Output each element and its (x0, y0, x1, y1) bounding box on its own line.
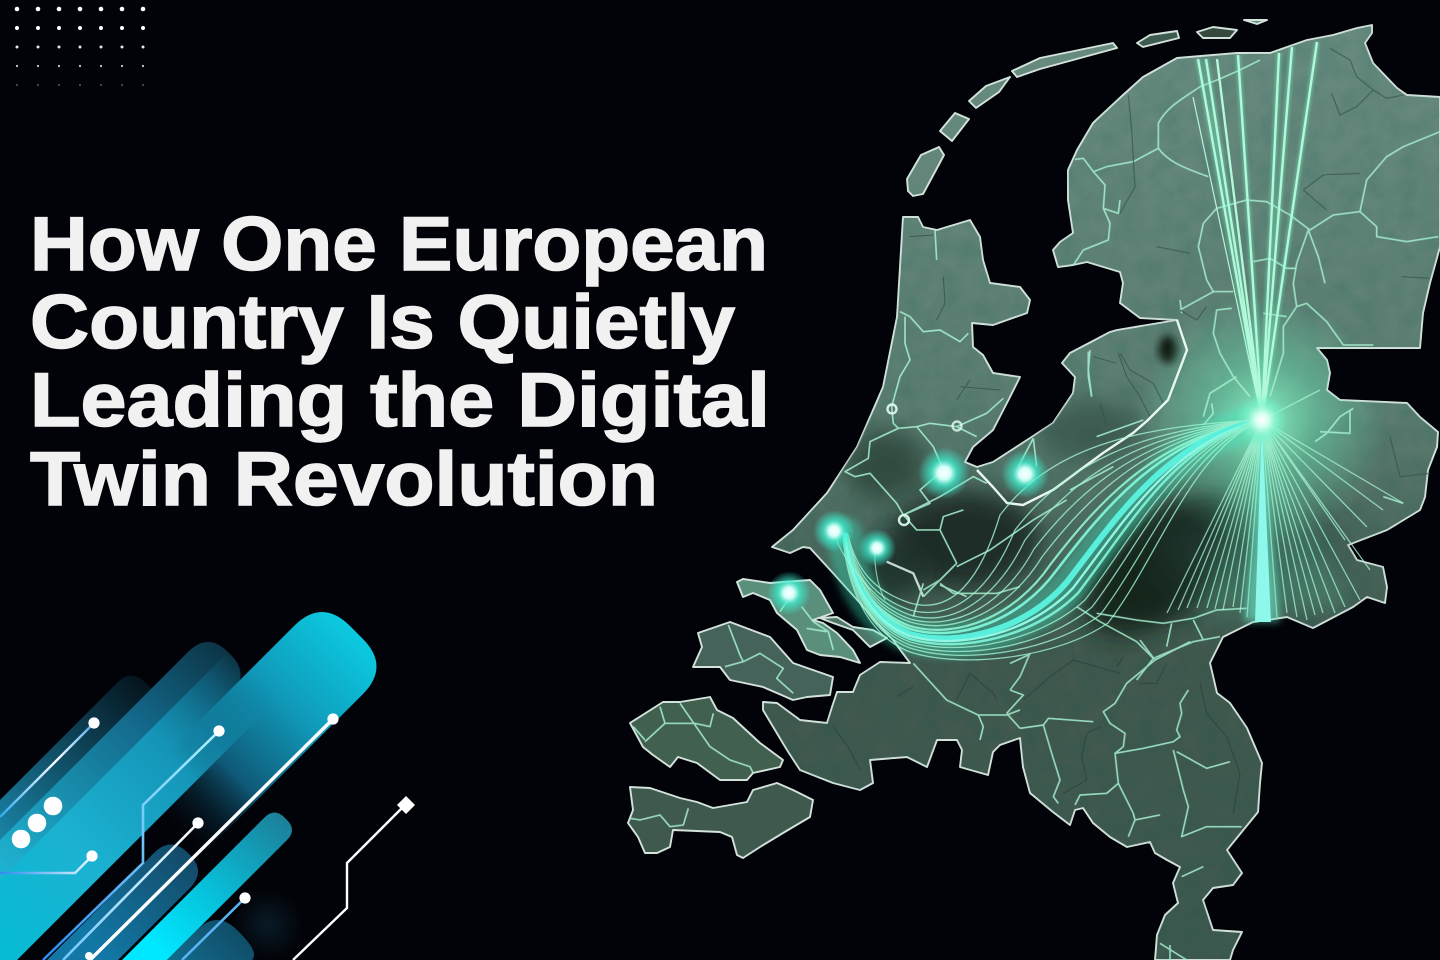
veins: Holland and Flevoland (845, 230, 1150, 597)
title: Country Is Quietly (30, 280, 735, 365)
trace end nodes (12, 713, 415, 960)
veins: east and south (1072, 403, 1430, 680)
circuit traces (0, 719, 406, 960)
title: How One European (30, 202, 768, 287)
veins: north provinces (1073, 48, 1440, 417)
title: Twin Revolution (30, 437, 658, 522)
light rays: north fan (1193, 42, 1317, 420)
map: islands and mainland (628, 20, 1440, 960)
city glows (767, 404, 1049, 615)
curved data flow bundle (834, 420, 1262, 660)
veins: islands and south-west (630, 567, 1020, 827)
dot grid decoration (15, 7, 145, 86)
map: network veins (630, 48, 1440, 960)
central hub glow (1236, 394, 1288, 446)
light rays: south fan (1167, 390, 1403, 620)
Flevoland bright shoreline (977, 320, 1187, 505)
map: shading and dark regions (768, 26, 1440, 960)
diagonal gradient bars (0, 612, 376, 960)
map of the Netherlands with data flows (620, 0, 1440, 960)
title: Leading the Digital (30, 358, 770, 443)
circuit graphic: diagonal bars and traces (0, 612, 415, 960)
light beam south (1244, 420, 1280, 622)
title (30, 202, 770, 522)
